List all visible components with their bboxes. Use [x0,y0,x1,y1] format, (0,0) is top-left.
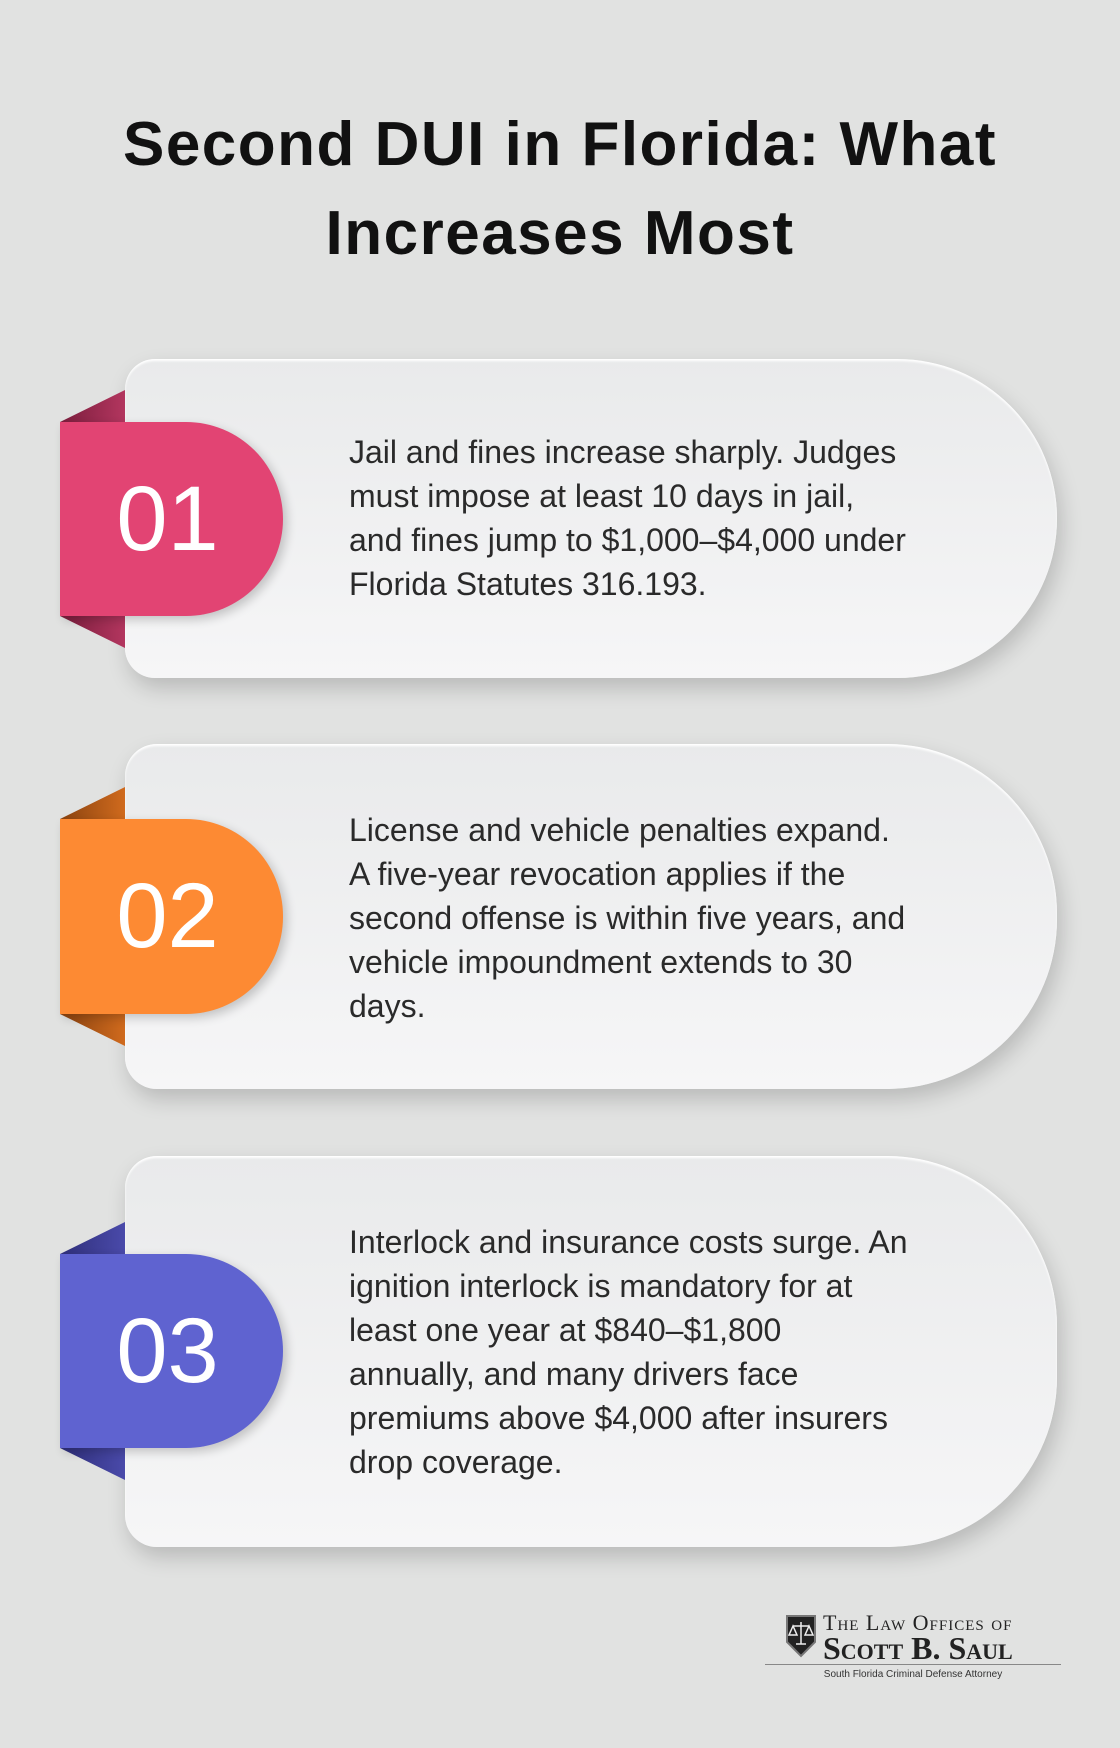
text 1: Florida Statutes 316.193. [349,566,707,602]
card 1 [125,359,1057,678]
text 2: License and vehicle penalties expand. [349,812,890,848]
badge 01: 01 [116,468,219,570]
badge 03 [60,1254,283,1448]
text 3: least one year at $840–$1,800 [349,1312,781,1348]
badge 02: 02 [116,865,219,967]
badge 03: 03 [116,1300,219,1402]
text 2: days. [349,988,425,1024]
text 2 [349,812,905,1024]
card 2 [125,744,1057,1089]
text 2: A five-year revocation applies if the [349,856,845,892]
text 1 [349,434,906,602]
title: Second DUI in Florida: What [123,110,997,179]
badge 01 [60,422,283,616]
text 3: drop coverage. [349,1444,562,1480]
title: Increases Most [326,199,794,268]
text 1: Jail and fines increase sharply. Judges [349,434,896,470]
title [123,110,997,268]
fold 1 [60,390,125,648]
icon: shield scales [786,1615,816,1658]
logo text [823,1610,1013,1666]
fold 2 [60,787,125,1046]
text 3: Interlock and insurance costs surge. An [349,1224,908,1260]
text 2: vehicle impoundment extends to 30 [349,944,852,980]
badge 02 [60,819,283,1014]
text 3: premiums above $4,000 after insurers [349,1400,888,1436]
text 2: second offense is within five years, and [349,900,905,936]
text 3 [349,1224,908,1480]
logo: South Florida Criminal Defense Attorney [824,1669,1002,1680]
text 3: ignition interlock is mandatory for at [349,1268,852,1304]
logo text: The Law Offices of [823,1610,1012,1635]
logo text: Scott B. Saul [823,1630,1013,1666]
logo [765,1610,1061,1680]
card 3 [125,1156,1057,1547]
text 1: and fines jump to $1,000–$4,000 under [349,522,906,558]
text 3: annually, and many drivers face [349,1356,798,1392]
fold 3 [60,1222,125,1480]
text 1: must impose at least 10 days in jail, [349,478,854,514]
